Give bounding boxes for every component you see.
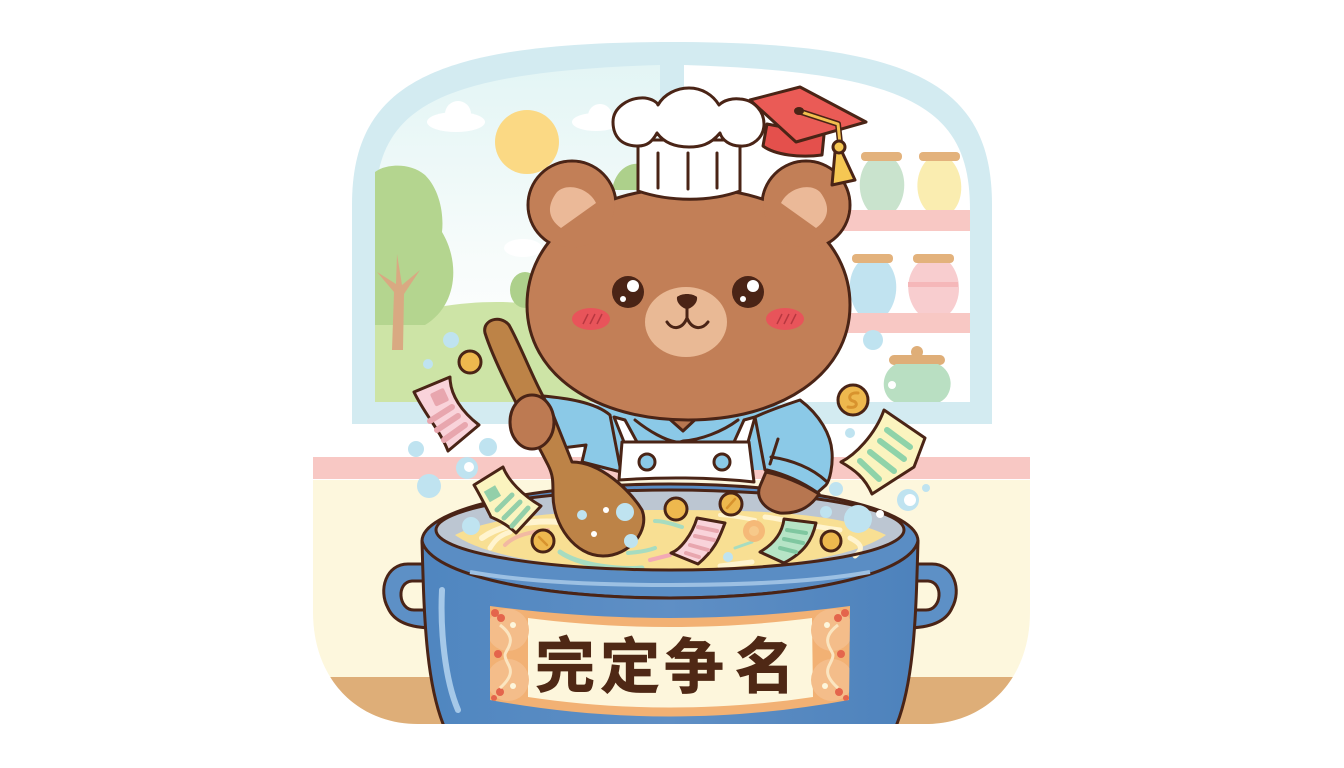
- apron straps: [614, 417, 755, 442]
- floor: [330, 677, 1013, 724]
- nose and mouth: [667, 294, 708, 328]
- collar: [635, 420, 738, 442]
- ears: [528, 161, 616, 249]
- pot handles: [384, 564, 956, 628]
- eyes: [612, 276, 764, 308]
- neck: [665, 415, 700, 431]
- jars lower: [850, 254, 959, 313]
- wooden spoon: [485, 319, 644, 556]
- hill: [375, 302, 660, 402]
- bear head group: [527, 87, 866, 420]
- label text: [536, 634, 787, 694]
- chef hat: [613, 88, 764, 199]
- muzzle: [645, 287, 727, 357]
- pot back: rim, inner wall and soup: [422, 484, 918, 598]
- window pane left with sky: [375, 65, 660, 402]
- torso: [570, 405, 810, 470]
- pink soup paper: [671, 518, 725, 564]
- sun: [495, 110, 559, 174]
- clouds: [427, 101, 620, 257]
- bear body: [543, 396, 832, 513]
- inner ears: [781, 187, 827, 228]
- right sleeve: [755, 400, 832, 493]
- pink paper: [414, 377, 479, 451]
- left hand: [510, 395, 554, 449]
- label corner ornaments: [487, 609, 853, 701]
- head: [527, 188, 850, 420]
- right hand: [759, 472, 819, 513]
- label: [487, 606, 853, 716]
- pink wall stripe: [313, 457, 1030, 479]
- bubbles: [408, 330, 930, 562]
- wall lower panel: [313, 478, 1030, 728]
- panel: window: [352, 42, 992, 424]
- pot front: [422, 541, 918, 735]
- soup swirls: [482, 515, 860, 568]
- tree: [375, 166, 540, 350]
- label text: 名: [735, 634, 795, 701]
- ear fill overlay merging ears with head: [530, 162, 848, 248]
- floating papers: [414, 377, 925, 564]
- blush: [572, 308, 804, 330]
- small yellow paper: [474, 467, 541, 533]
- apron buttons: [639, 454, 730, 470]
- window pane right: [684, 65, 970, 402]
- tree behind hat: [612, 164, 645, 190]
- pot rim highlight: [470, 572, 870, 585]
- jars upper: [860, 152, 961, 210]
- label text: 定: [600, 634, 660, 701]
- gold coins: [459, 351, 868, 552]
- soup: [455, 510, 886, 570]
- label text: 完: [535, 633, 595, 700]
- apron: [619, 442, 754, 482]
- green soup paper: [760, 519, 816, 563]
- shelves: [840, 210, 970, 333]
- label text: 争: [664, 634, 724, 701]
- yellow-green paper right: [841, 410, 925, 494]
- left sleeve: [543, 396, 621, 472]
- pot body highlight: [442, 590, 458, 710]
- graduation cap: [750, 87, 866, 185]
- jar with lid: [884, 346, 951, 402]
